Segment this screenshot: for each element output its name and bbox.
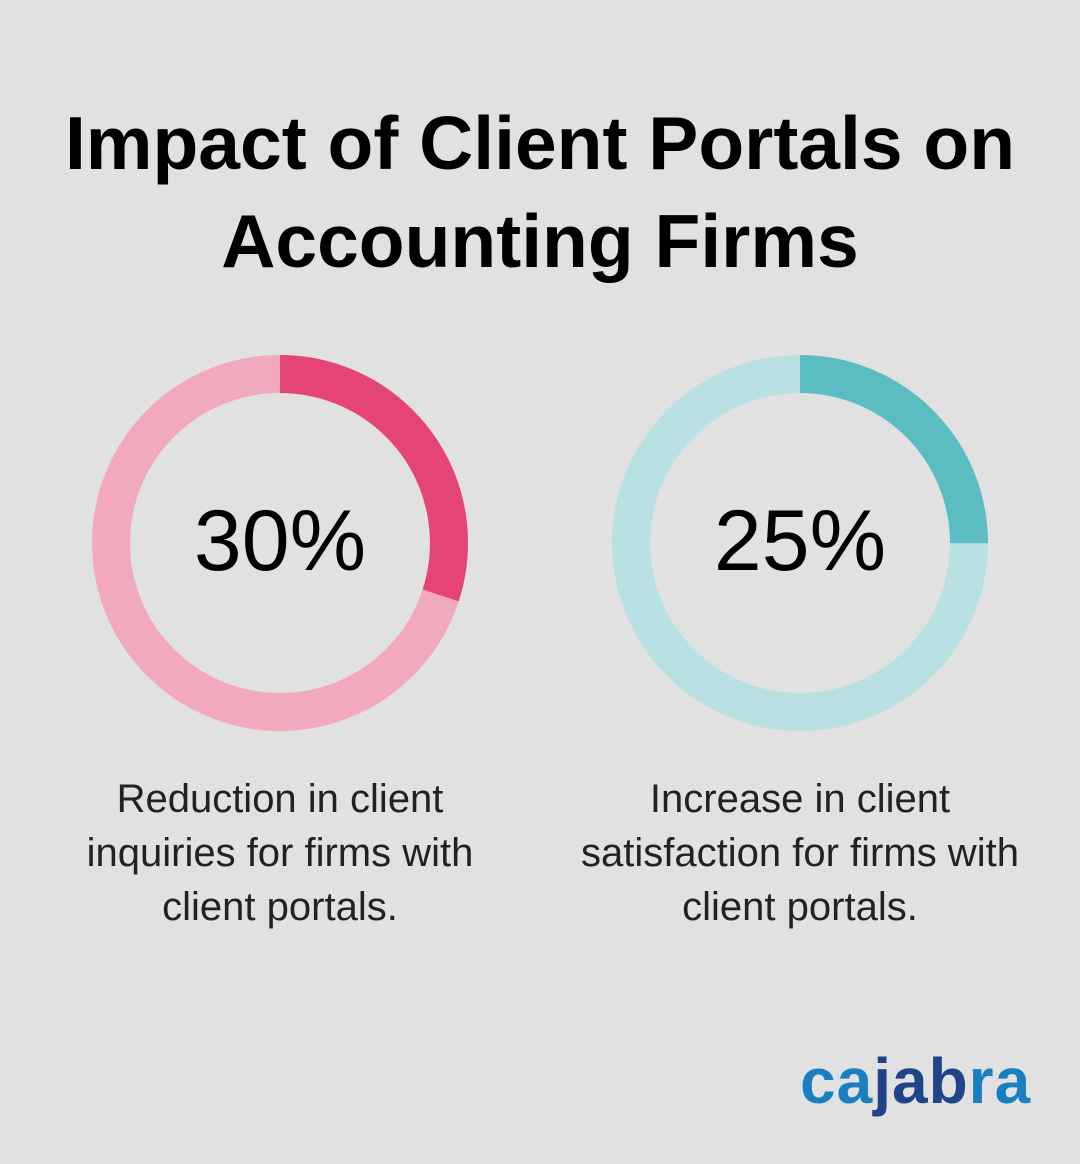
label: reduction: client portals. bbox=[162, 885, 398, 929]
label: increase bbox=[581, 777, 1019, 929]
donut charts bbox=[92, 355, 988, 731]
label: reduction: Reduction in client bbox=[117, 777, 443, 821]
logo: cajabra bbox=[800, 1045, 1031, 1117]
label: increase: satisfaction for firms with bbox=[581, 831, 1019, 875]
donut: 30%: 30% bbox=[194, 493, 366, 589]
label: increase: Increase in client bbox=[650, 777, 950, 821]
title bbox=[65, 101, 1015, 283]
label: increase: client portals. bbox=[682, 885, 918, 929]
donut: 25% bbox=[631, 374, 969, 712]
donut: 25%: 25% bbox=[714, 493, 886, 589]
label: reduction: inquiries for firms with bbox=[87, 831, 473, 875]
donut: 30% bbox=[111, 374, 449, 712]
label: reduction bbox=[87, 777, 473, 929]
title: Accounting Firms bbox=[221, 199, 859, 283]
title: Impact of Client Portals on bbox=[65, 101, 1015, 185]
